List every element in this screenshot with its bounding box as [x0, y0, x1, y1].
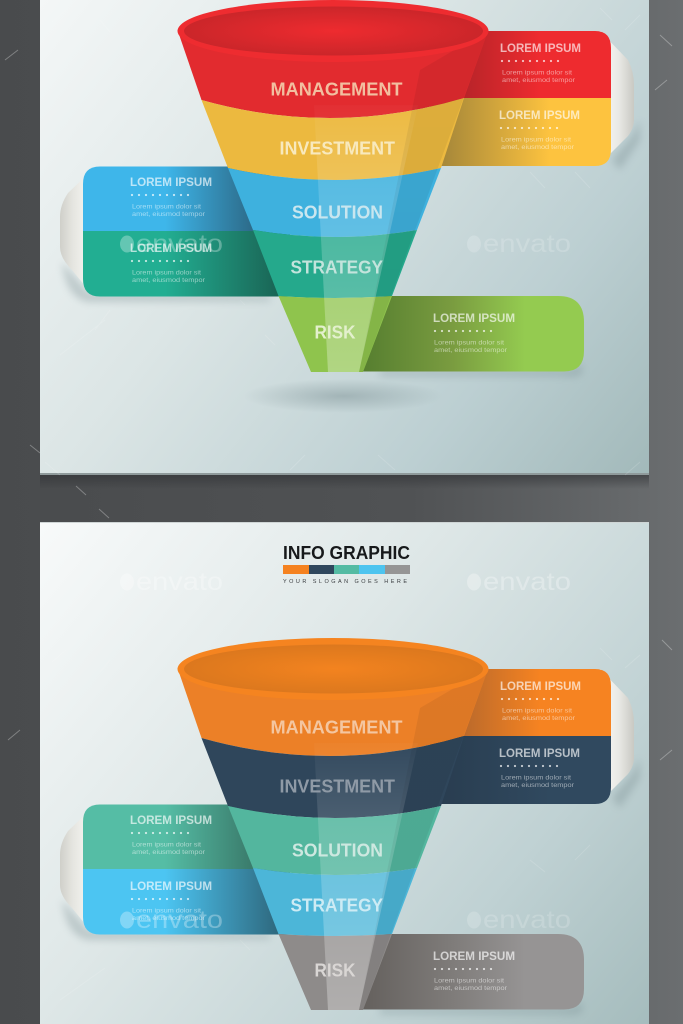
panel: top card with colourful funnel [40, 0, 649, 475]
tab: red [450, 31, 611, 98]
band: management [178, 668, 488, 756]
band: management [178, 30, 488, 118]
tab: orange: Lorem ipsum dolor sit [502, 708, 572, 714]
tab: green: Lorem ipsum dolor sit [434, 340, 504, 346]
inner opening [184, 644, 483, 694]
tab: sky blue: Lorem ipsum dolor sit [132, 908, 201, 914]
band: risk [278, 934, 392, 1010]
tab: teal: amet, eiusmod tempor [132, 277, 206, 284]
panel: right side tabs [430, 31, 640, 170]
tab: gray: Lorem ipsum dolor sit [434, 978, 504, 984]
header: info graphic [283, 543, 410, 585]
tab: orange: amet, eiusmod tempor [502, 715, 576, 722]
funnel labels: STRATEGY [290, 896, 383, 916]
band: solution [228, 168, 441, 237]
tab: sky blue: LOREM IPSUM [130, 881, 212, 893]
rim [178, 0, 488, 62]
watermark: envato lower left: envato [136, 906, 223, 934]
tab back shadow [612, 120, 640, 170]
band: risk [278, 296, 392, 372]
tab back shadow [62, 900, 270, 940]
funnel: muted [178, 638, 488, 1010]
tab: navy: Lorem ipsum dolor sit [501, 774, 571, 782]
funnel shadow [243, 379, 443, 413]
tab: blue: amet, eiusmod tempor [132, 211, 206, 218]
funnel labels: RISK [314, 322, 356, 342]
tab: teal [83, 231, 290, 296]
tab back shadow [62, 262, 270, 302]
funnel labels: INVESTMENT [280, 776, 395, 796]
tab: teal: Lorem ipsum dolor sit [132, 270, 201, 276]
tab: green: LOREM IPSUM [433, 313, 515, 325]
tab: blue [83, 166, 270, 231]
band: solution [228, 806, 441, 875]
rim [178, 638, 488, 700]
band: investment [202, 98, 464, 180]
tab: green: amet, eiusmod tempor [434, 347, 508, 354]
slogan: YOUR SLOGAN GOES HERE [283, 579, 407, 585]
funnel: colourful [178, 0, 488, 372]
tab: yellow [430, 98, 611, 166]
colour strip [283, 565, 410, 574]
tab: teal: amet, eiusmod tempor [132, 849, 206, 856]
tab: navy: LOREM IPSUM [499, 748, 580, 760]
watermark: envato left: envato [136, 230, 223, 258]
panel: right side tabs [430, 669, 640, 808]
funnel labels: MANAGEMENT [270, 80, 402, 100]
tab back: right curl [600, 31, 634, 164]
funnel group, muted [60, 638, 640, 1015]
funnel labels: STRATEGY [290, 258, 383, 278]
funnel labels: INVESTMENT [280, 138, 395, 158]
tab back: left curl [60, 172, 90, 292]
funnel labels [270, 80, 402, 342]
heading: INFO GRAPHIC [283, 543, 410, 563]
funnel labels [270, 718, 402, 980]
tab: yellow: LOREM IPSUM [499, 110, 580, 122]
panel: left side tabs [60, 804, 290, 940]
tab: sky blue: amet, eiusmod tempor [132, 915, 206, 922]
watermark: envato right: envato [483, 230, 571, 258]
tab: red: Lorem ipsum dolor sit [502, 70, 572, 76]
tab back shadow [612, 758, 640, 808]
tab: orange [450, 669, 611, 736]
watermark: envato upper right: envato [483, 568, 571, 596]
tab: navy: amet, eiusmod tempor [501, 782, 575, 789]
tab: yellow: Lorem ipsum dolor sit [501, 136, 571, 144]
panel: bottom card with muted funnel [40, 522, 649, 1024]
light beam [314, 743, 418, 1010]
funnel labels: SOLUTION [292, 840, 383, 860]
tab: gray [355, 934, 584, 1010]
watermark: envato upper left: envato [136, 568, 223, 596]
tab back: left curl [60, 810, 90, 930]
tab: sky blue [83, 869, 290, 934]
right shade [359, 30, 488, 372]
funnel labels: RISK [314, 960, 356, 980]
tab: red: LOREM IPSUM [500, 43, 581, 55]
tab back: right curl [600, 669, 634, 802]
light beam [314, 105, 418, 372]
panel: left side tabs [60, 166, 290, 302]
watermark: envato lower right: envato [483, 906, 571, 934]
tab: yellow: amet, eiusmod tempor [501, 144, 575, 151]
tab: blue: Lorem ipsum dolor sit [132, 204, 201, 210]
tab: teal [83, 804, 270, 869]
tab: teal: LOREM IPSUM [130, 243, 212, 255]
tab: red: amet, eiusmod tempor [502, 77, 576, 84]
funnel labels: MANAGEMENT [270, 718, 402, 738]
tab shadow: green [380, 360, 582, 377]
band: strategy [253, 230, 417, 298]
tab: orange: LOREM IPSUM [500, 681, 581, 693]
tab: navy [430, 736, 611, 804]
band: strategy [253, 868, 417, 936]
tab shadow: gray [380, 998, 582, 1015]
tab: gray: amet, eiusmod tempor [434, 985, 508, 992]
tab: teal: LOREM IPSUM [130, 815, 212, 827]
tab: blue: LOREM IPSUM [130, 177, 212, 189]
tab: teal: Lorem ipsum dolor sit [132, 842, 201, 848]
band: investment [202, 736, 464, 818]
tab: green [355, 296, 584, 372]
tab: gray: LOREM IPSUM [433, 951, 515, 963]
inner opening [184, 6, 483, 56]
right shade [359, 668, 488, 1010]
funnel labels: SOLUTION [292, 202, 383, 222]
